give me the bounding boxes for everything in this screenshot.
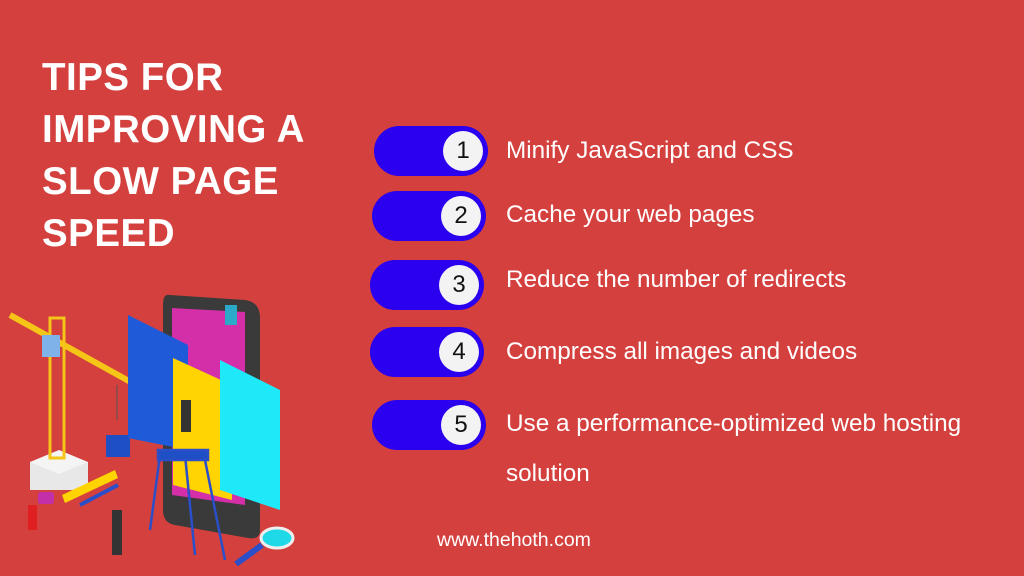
ladder: [150, 450, 225, 560]
tip 2 pill: 2: [454, 202, 468, 229]
tip 3 pill: 3: [452, 271, 466, 298]
tip 4 pill: 4: [452, 338, 466, 365]
title: IMPROVING A: [42, 108, 305, 151]
panel: map: [220, 360, 280, 510]
panel: home page: [128, 315, 188, 450]
tip 3 pill: [370, 260, 484, 310]
tip 1 text: Minify JavaScript and CSS: [506, 137, 794, 164]
tip 2 pill: [372, 191, 486, 241]
tip 3 text: Reduce the number of redirects: [506, 266, 846, 293]
title: SLOW PAGE: [42, 160, 279, 203]
title: TIPS FOR: [42, 56, 224, 99]
tip 2 text: Cache your web pages: [506, 201, 755, 228]
tip 1 pill: 1: [456, 137, 470, 164]
chat bubble: [38, 492, 54, 504]
phone: [163, 295, 260, 538]
tip 5 text: solution: [506, 460, 590, 487]
crane: [10, 315, 136, 490]
website url: www.thehoth.com: [437, 529, 591, 551]
people: [28, 305, 237, 555]
illustration: [8, 294, 294, 566]
magnifier: [236, 528, 293, 564]
tip 4 pill: [370, 327, 484, 377]
tip 5 text: Use a performance-optimized web hosting: [506, 410, 961, 437]
tip 5 text: [506, 410, 961, 487]
tip 5 pill: [372, 400, 486, 450]
panel: data analysis: [173, 358, 232, 500]
title: [42, 56, 305, 255]
title: SPEED: [42, 212, 175, 255]
tip 1 pill: [374, 126, 488, 176]
tip 5 pill: 5: [454, 411, 468, 438]
ruler and pencil: [62, 470, 118, 505]
tip 4 text: Compress all images and videos: [506, 338, 857, 365]
